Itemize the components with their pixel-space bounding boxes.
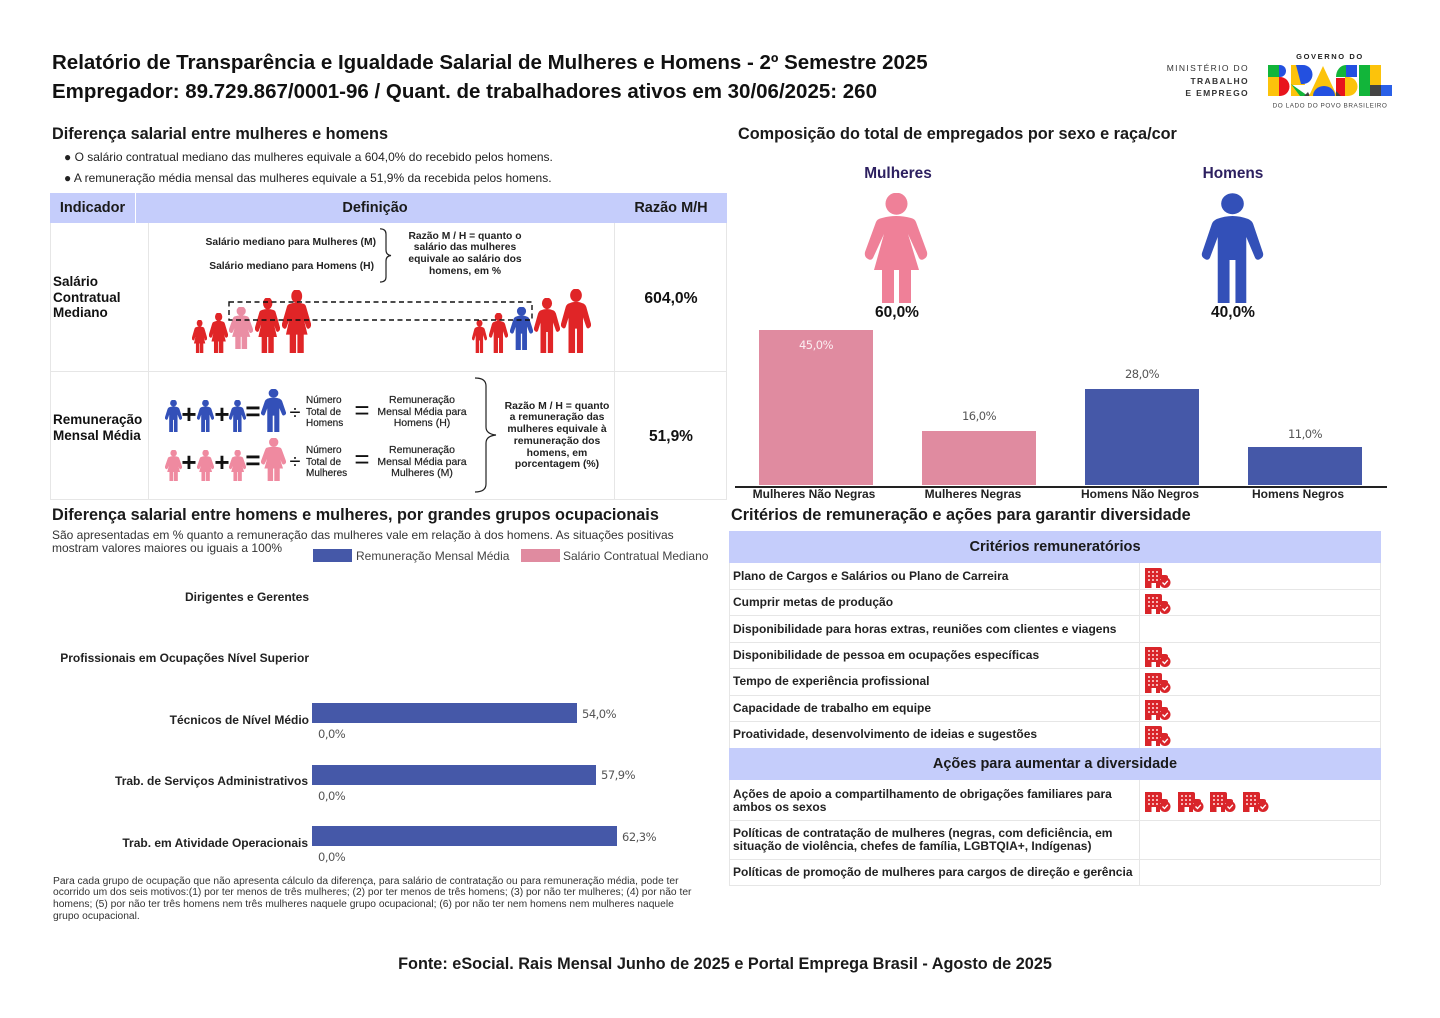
text: salário mediano mulheres: Salário mediano para Mulheres (M) bbox=[205, 237, 376, 248]
legend swatch: remuneração bbox=[313, 549, 352, 562]
text: razão M/H: mulheres equivale à bbox=[507, 424, 607, 435]
bar: mulheres negras bbox=[922, 431, 1036, 485]
label: serviços administrativos: Trab. de Serviços Administrativos bbox=[115, 774, 308, 788]
logo: governo do brasil: GOVERNO DO bbox=[1296, 52, 1364, 61]
row label: salário contratual mediano: Contratual bbox=[53, 290, 120, 305]
logo: ministério: E EMPREGO bbox=[1185, 88, 1249, 98]
operator: divide: ÷ bbox=[290, 402, 300, 424]
legend text: remuneração: Remuneração Mensal Média bbox=[356, 549, 509, 563]
brace bbox=[380, 228, 392, 283]
operator: equals: = bbox=[354, 395, 370, 425]
action: obrigações familiares: ambos os sexos bbox=[733, 800, 826, 814]
operator: plus: + bbox=[214, 447, 230, 477]
value: 62,3%: 62,3% bbox=[622, 830, 656, 844]
value: 57,9%: 57,9% bbox=[601, 768, 635, 782]
logo: ministério: MINISTÉRIO DO bbox=[1167, 63, 1249, 73]
row label: remuneração mensal média: Mensal Média bbox=[53, 428, 141, 442]
axis label: homens não negros: Homens Não Negros bbox=[1081, 487, 1199, 501]
bar: serviços bbox=[312, 765, 596, 785]
heading: grupos ocupacionais: Diferença salarial entre homens e mulheres, por grandes grupos ocupacionais bbox=[52, 506, 659, 524]
value: 0,0%: 0,0% bbox=[318, 850, 345, 864]
text: razão M/H: Razão M / H = quanto o bbox=[408, 230, 521, 242]
text: remuneração homens: Mensal Média para bbox=[377, 406, 467, 418]
icons: soma mulheres bbox=[165, 438, 286, 481]
legend swatch: salário bbox=[521, 549, 560, 562]
brace bbox=[475, 377, 496, 493]
bar: homens negros bbox=[1248, 447, 1362, 485]
table header: definição bbox=[136, 193, 614, 223]
icon: empresa bbox=[1145, 700, 1170, 720]
label: profissionais: Profissionais em Ocupações Nível Superior bbox=[60, 651, 309, 665]
row label: salário contratual mediano: Mediano bbox=[53, 305, 108, 320]
row label: remuneração mensal média bbox=[53, 412, 142, 442]
text: número total de mulheres: Total de bbox=[306, 456, 341, 468]
text: salário mediano homens: Salário mediano para Homens (H) bbox=[209, 261, 374, 272]
legend bbox=[313, 549, 708, 563]
footnote: homens; (5) por não ter três homens nem três mulheres naquele grupo ocupacional; (6) por não ter nem homens nem mulheres naquele bbox=[53, 899, 674, 910]
logo: governo do brasil bbox=[1268, 52, 1392, 110]
icon: empresa bbox=[1145, 568, 1170, 588]
bullet text: ● A remuneração média mensal das mulheres equivale a 51,9% da recebida pelos homens. bbox=[64, 170, 552, 184]
logo: ministério bbox=[1167, 63, 1249, 98]
title: Empregador: 89.729.867/0001-96 / Quant. de trabalhadores ativos em 30/06/2025: 260 bbox=[52, 80, 877, 103]
icons: quatro empresas bbox=[1145, 792, 1268, 812]
text: remuneração homens: Remuneração bbox=[389, 394, 455, 406]
action: obrigações familiares: Ações de apoio a compartilhamento de obrigações familiares para bbox=[733, 786, 1112, 800]
logo: ministério: TRABALHO bbox=[1190, 76, 1249, 86]
text: número total de homens: Homens bbox=[306, 418, 343, 429]
header: critérios remuneratórios bbox=[729, 531, 1381, 563]
text: número total de homens: Total de bbox=[306, 406, 341, 418]
bar: mulheres não negras bbox=[759, 330, 873, 485]
label: homens: Homens bbox=[1203, 165, 1263, 182]
text: razão M/H bbox=[408, 230, 522, 277]
diagram: remuneração média bbox=[165, 377, 609, 493]
operator: divide: ÷ bbox=[290, 451, 300, 473]
icon: homem bbox=[1202, 193, 1264, 303]
row label: remuneração mensal média: Remuneração bbox=[53, 412, 142, 427]
operator: equals: = bbox=[354, 444, 370, 474]
text: remuneração mulheres bbox=[377, 444, 467, 479]
text: razão M/H: a remuneração das bbox=[510, 412, 604, 423]
icons: homens por salário bbox=[472, 289, 591, 353]
text: remuneração homens bbox=[377, 394, 467, 429]
value: 0,0%: 0,0% bbox=[318, 789, 345, 803]
action: políticas de contratação bbox=[733, 826, 1112, 853]
text: razão M/H: Razão M / H = quanto bbox=[505, 400, 609, 412]
operator: plus: + bbox=[181, 399, 197, 429]
icons: mulheres por salário bbox=[192, 290, 311, 353]
criterion: proatividade: Proatividade, desenvolvimento de ideias e sugestões bbox=[733, 727, 1037, 741]
title bbox=[52, 51, 928, 103]
title: Relatório de Transparência e Igualdade Salarial de Mulheres e Homens - 2º Semestre 2025 bbox=[52, 51, 928, 74]
label: dirigentes: Dirigentes e Gerentes bbox=[185, 590, 309, 604]
axis label: mulheres não negras: Mulheres Não Negras bbox=[753, 487, 875, 501]
text: descrição bbox=[52, 528, 674, 554]
value: 604,0%: 604,0% bbox=[644, 290, 698, 307]
logo: governo do brasil: DO LADO DO POVO BRASILEIRO bbox=[1273, 102, 1387, 110]
text: razão M/H bbox=[505, 400, 609, 470]
criterion: equipe: Capacidade de trabalho em equipe bbox=[733, 701, 931, 715]
source: Fonte: eSocial. Rais Mensal Junho de 2025 e Portal Emprega Brasil - Agosto de 2025 bbox=[398, 955, 1052, 973]
operator: plus: + bbox=[214, 399, 230, 429]
value: 28,0%: 28,0% bbox=[1125, 367, 1159, 381]
heading: diferença salarial: Diferença salarial entre mulheres e homens bbox=[52, 125, 388, 143]
icons: soma homens bbox=[165, 389, 286, 432]
text: remuneração homens: Homens (H) bbox=[394, 417, 450, 429]
action: políticas de contratação: Políticas de contratação de mulheres (negras, com deficiência, em bbox=[733, 826, 1112, 840]
value: 45,0%: 45,0% bbox=[799, 338, 833, 352]
icon: empresa bbox=[1145, 726, 1170, 746]
action: obrigações familiares bbox=[733, 786, 1112, 814]
row label: salário contratual mediano: Salário bbox=[53, 274, 98, 289]
label: técnicos: Técnicos de Nível Médio bbox=[170, 713, 309, 727]
table header: indicador bbox=[50, 193, 135, 223]
bar: técnicos bbox=[312, 703, 577, 723]
text: número total de mulheres: Número bbox=[306, 445, 342, 456]
operator: equals: = bbox=[245, 396, 261, 426]
panel: tabela indicadores bbox=[50, 193, 727, 500]
icon: mulher bbox=[864, 193, 928, 303]
value: 54,0%: 54,0% bbox=[582, 707, 616, 721]
table header: razão: Razão M/H bbox=[634, 200, 708, 216]
row label: salário contratual mediano bbox=[53, 274, 120, 320]
text: número total de homens: Número bbox=[306, 395, 342, 406]
text: número total de mulheres: Mulheres bbox=[306, 468, 347, 479]
heading: critérios: Critérios de remuneração e ações para garantir diversidade bbox=[731, 506, 1191, 524]
text: número total de mulheres bbox=[306, 445, 347, 479]
operator: plus: + bbox=[181, 447, 197, 477]
text: remuneração mulheres: Mulheres (M) bbox=[391, 467, 453, 479]
text: descrição: mostram valores maiores ou iguais a 100% bbox=[52, 540, 282, 554]
criterion: tempo de experiência: Tempo de experiência profissional bbox=[733, 674, 930, 688]
criterion: disponibilidade horas: Disponibilidade para horas extras, reuniões com clientes e viagens bbox=[733, 622, 1116, 636]
icon: empresa bbox=[1145, 647, 1170, 667]
action: políticas de promoção: Políticas de promoção de mulheres para cargos de direção e gerência bbox=[733, 865, 1132, 879]
bar: operacionais bbox=[312, 826, 617, 846]
bar: homens não negros bbox=[1085, 389, 1199, 485]
table header: razão bbox=[615, 193, 727, 223]
value: 0,0%: 0,0% bbox=[318, 727, 345, 741]
table header: definição: Definição bbox=[342, 200, 408, 216]
operator: equals: = bbox=[245, 445, 261, 475]
value: 16,0%: 16,0% bbox=[962, 409, 996, 423]
legend text: salário: Salário Contratual Mediano bbox=[563, 549, 708, 563]
action: políticas de contratação: situação de violência, chefes de família, LGBTQIA+, Indígenas) bbox=[733, 839, 1091, 853]
text: razão M/H: equivale ao salário dos bbox=[408, 254, 522, 265]
text: remuneração mulheres: Remuneração bbox=[389, 444, 455, 456]
icon: empresa bbox=[1145, 594, 1170, 614]
icon: empresa bbox=[1145, 673, 1170, 693]
text: remuneração mulheres: Mensal Média para bbox=[377, 456, 467, 468]
label: atividade operacional: Trab. em Atividade Operacionais bbox=[122, 836, 308, 850]
diagram: salário mediano bbox=[205, 228, 522, 283]
text: razão M/H: homens, em % bbox=[429, 266, 501, 277]
footnote: Para cada grupo de ocupação que não apresenta cálculo da diferença, para salário de contratação ou para remuneração média, pode ter bbox=[53, 876, 678, 886]
chart: composição por raça/cor bbox=[735, 330, 1387, 501]
value: 60,0%: 60,0% bbox=[875, 304, 919, 321]
bullet text: ● O salário contratual mediano das mulheres equivale a 604,0% do recebido pelos homens. bbox=[64, 150, 553, 164]
dashed median box bbox=[228, 301, 533, 321]
axis label: mulheres negras: Mulheres Negras bbox=[925, 487, 1021, 501]
label: mulheres: Mulheres bbox=[864, 165, 932, 182]
value: 11,0%: 11,0% bbox=[1288, 427, 1322, 441]
criterion: plano de cargos: Plano de Cargos e Salários ou Plano de Carreira bbox=[733, 569, 1008, 583]
footnote: grupo ocupacional. bbox=[53, 911, 140, 922]
header: critérios remuneratórios: Critérios remuneratórios bbox=[969, 539, 1141, 555]
chart: grupos ocupacionais bbox=[60, 590, 656, 864]
value: 40,0%: 40,0% bbox=[1211, 304, 1255, 321]
footnote: ocorrido um dos seis motivos:(1) por ter menos de três mulheres; (2) por ter menos de três homens; (3) por não ter mulheres; (4) por não ter bbox=[53, 887, 691, 898]
footnote bbox=[53, 876, 692, 922]
table header: indicador: Indicador bbox=[60, 200, 125, 216]
value: 51,9%: 51,9% bbox=[649, 428, 693, 445]
bullet text bbox=[64, 150, 553, 184]
text: razão M/H: porcentagem (%) bbox=[515, 459, 599, 470]
criterion: metas: Cumprir metas de produção bbox=[733, 595, 893, 609]
text: razão M/H: salário das mulheres bbox=[414, 242, 516, 253]
axis label: homens negros: Homens Negros bbox=[1252, 487, 1344, 501]
text: descrição: São apresentadas em % quanto a remuneração das mulheres vale em relação à dos homens. As situações positivas bbox=[52, 528, 674, 542]
heading: composição: Composição do total de empregados por sexo e raça/cor bbox=[738, 124, 1177, 142]
text: razão M/H: remuneração dos bbox=[514, 436, 600, 447]
header: ações: Ações para aumentar a diversidade bbox=[933, 756, 1177, 772]
text: número total de homens bbox=[306, 395, 343, 429]
header: ações bbox=[729, 748, 1381, 780]
criterion: disponibilidade pessoa: Disponibilidade de pessoa em ocupações específicas bbox=[733, 648, 1039, 662]
text: razão M/H: homens, em bbox=[527, 448, 587, 459]
